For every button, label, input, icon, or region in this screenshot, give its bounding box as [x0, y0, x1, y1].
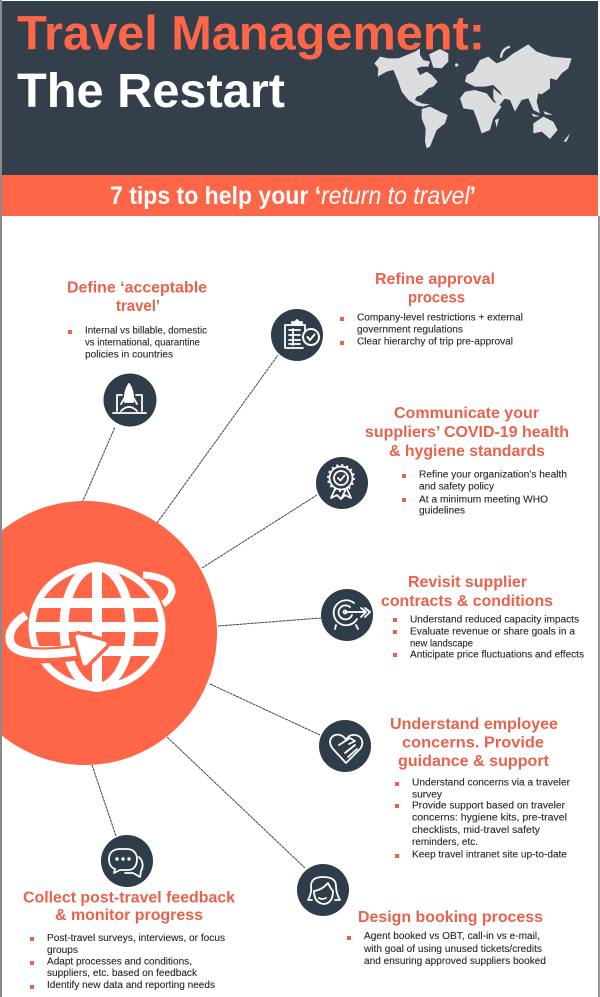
central circle with globe: [0, 501, 217, 765]
tip 4: revisit supplier contracts: Understand reduced capacity impacts: [410, 614, 579, 626]
tip 2: refine approval process: [340, 271, 523, 348]
tip 7: collect feedback: Collect post-travel feedback: [23, 890, 235, 906]
tip 7: collect feedback: [23, 890, 235, 991]
tip 2: refine approval process: government regulations: [357, 324, 463, 336]
tip 3: communicate health standards: suppliers’ COVID-19 health: [365, 424, 569, 441]
tip 4: revisit supplier contracts: Revisit supplier: [408, 574, 527, 591]
header banner: [2, 1, 598, 175]
tip 5: employee concerns: Keep travel intranet site up-to-date: [412, 850, 567, 860]
tip 3: communicate health standards: & hygiene standards: [389, 443, 545, 460]
tip 6: design booking process: and ensuring approved suppliers booked: [364, 956, 546, 967]
icon: chat bubbles: [101, 835, 153, 887]
tip 7: collect feedback: suppliers, etc. based on feedback: [47, 968, 198, 979]
tip 4: revisit supplier contracts: [381, 574, 584, 660]
tip 5: employee concerns: Understand concerns via a traveler: [412, 778, 571, 788]
tip 5: employee concerns: Understand employee: [390, 716, 558, 733]
icon: woman with headset: [297, 864, 349, 916]
tip 5: employee concerns: Provide support based on traveler: [412, 800, 566, 812]
connector lines: [82, 355, 321, 868]
tip 2: refine approval process: Refine approval: [375, 271, 495, 288]
icon: rocket and laptop: [104, 374, 156, 426]
tip 1: define acceptable travel: [67, 280, 207, 360]
tip 5: employee concerns: [390, 716, 571, 860]
icon: target with arrow: [321, 589, 373, 641]
tip 4: revisit supplier contracts: contracts & conditions: [381, 593, 553, 610]
tip 7: collect feedback: Post-travel surveys, interviews, or focus: [47, 933, 225, 944]
tip 5: employee concerns: concerns. Provide: [402, 734, 544, 752]
tip 7: collect feedback: Identify new data and reporting needs: [47, 980, 215, 991]
tip 6: design booking process: Design booking process: [358, 909, 543, 926]
tip 6: design booking process: [347, 909, 546, 967]
tip 3: communicate health standards: [365, 405, 569, 516]
icon: award ribbon: [316, 457, 368, 509]
tip 1: define acceptable travel: vs international, quarantine: [85, 338, 200, 348]
tip 5: employee concerns: reminders, etc.: [412, 837, 478, 848]
title line 2: The Restart: [17, 65, 285, 118]
tip 4: revisit supplier contracts: Evaluate revenue or share goals in a: [410, 626, 575, 638]
icon: clipboard with check: [271, 309, 323, 361]
icon: world map: [374, 44, 572, 148]
tip 5: employee concerns: checklists, mid-travel safety: [412, 825, 540, 836]
tip 3: communicate health standards: At a minimum meeting WHO: [419, 494, 548, 506]
tip 6: design booking process: Agent booked vs OBT, call-in vs e-mail,: [364, 931, 540, 942]
tip 1: define acceptable travel: Define ‘acceptable: [67, 280, 207, 296]
tip 4: revisit supplier contracts: Anticipate price fluctuations and effects: [410, 650, 584, 660]
subtitle band: [2, 175, 598, 216]
tip 5: employee concerns: survey: [412, 790, 442, 800]
tip 1: define acceptable travel: travel’: [116, 298, 160, 315]
tip 5: employee concerns: guidance & support: [398, 753, 550, 770]
tip 6: design booking process: with goal of using unused tickets/credits: [363, 944, 542, 955]
tip 2: refine approval process: Clear hierarchy of trip pre-approval: [357, 336, 513, 348]
tip 3: communicate health standards: Refine your organization’s health: [419, 470, 567, 480]
tip 1: define acceptable travel: Internal vs billable, domestic: [85, 326, 207, 336]
tip 3: communicate health standards: Communicate your: [394, 405, 539, 422]
icon: globe with orbit arrow: [10, 565, 172, 690]
subtitle band: 7 tips to help your ‘return to travel’: [110, 182, 476, 210]
tip 7: collect feedback: groups: [47, 945, 78, 956]
tip 3: communicate health standards: and safety policy: [419, 482, 494, 492]
title line 1: Travel Management:: [17, 8, 485, 60]
tip 7: collect feedback: & monitor progress: [55, 907, 203, 924]
tip 7: collect feedback: Adapt processes and conditions,: [47, 956, 192, 968]
tip 3: communicate health standards: guidelines: [419, 506, 465, 516]
tip 2: refine approval process: process: [408, 290, 465, 306]
tip 2: refine approval process: Company-level restrictions + external: [357, 312, 523, 324]
tip 4: revisit supplier contracts: new landscape: [410, 638, 473, 650]
tip 1: define acceptable travel: policies in countries: [85, 350, 173, 360]
tip 5: employee concerns: concerns: hygiene kits, pre-travel: [412, 812, 567, 824]
icon: heart with hands: [319, 720, 371, 772]
